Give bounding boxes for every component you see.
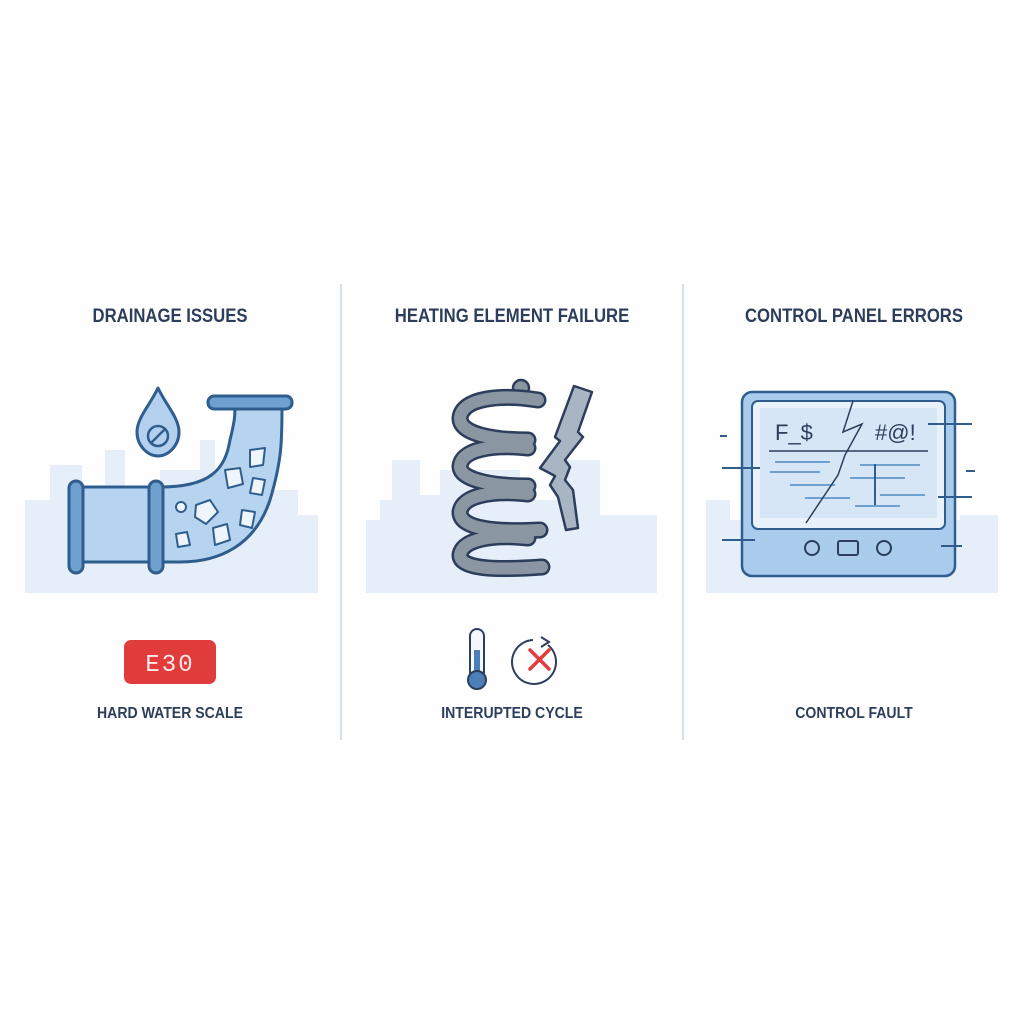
skyline background [25,440,318,593]
panel: drainage issues [25,305,318,722]
panel: heating element failure [366,305,657,722]
icon: pipe with scale [69,388,292,573]
icon: broken control screen: F_$ [775,420,813,445]
skyline background [706,500,998,593]
icon: thermometer [468,629,486,689]
icon: broken control screen [720,392,975,576]
badge: E30: E30 [145,652,195,679]
label: interupted cycle: INTERUPTED CYCLE [441,704,583,722]
label: hard water scale: HARD WATER SCALE [97,704,243,722]
label: control fault: CONTROL FAULT [795,704,914,722]
icon: cycle with x [512,637,556,684]
heading: drainage issues: DRAINAGE ISSUES [93,305,248,326]
panel: control panel errors [706,305,998,722]
badge: E30 [124,640,216,684]
icon: broken coil [460,380,592,569]
heading: heating element failure: HEATING ELEMENT FAILURE [395,305,629,326]
skyline background [366,460,657,593]
icon: broken control screen: #@! [875,420,916,445]
heading: control panel errors: CONTROL PANEL ERRORS [745,305,963,326]
